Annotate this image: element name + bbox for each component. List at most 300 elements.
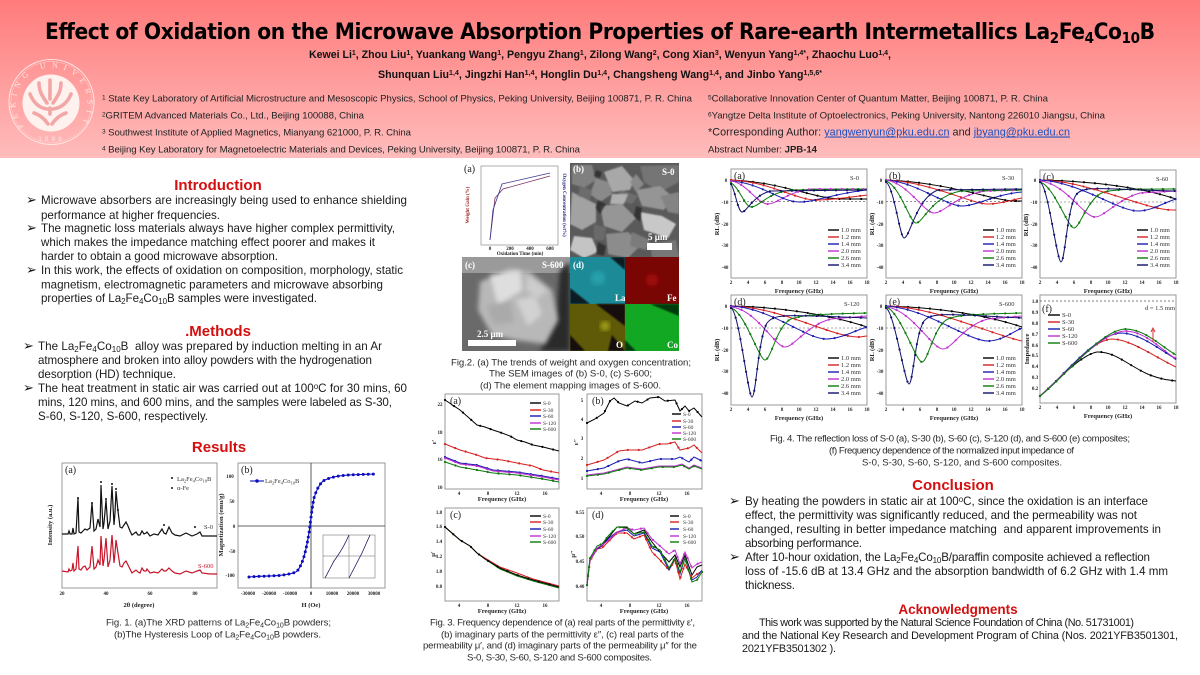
inset loop [323, 535, 375, 578]
chart: reflection loss S-120: 18 [864, 408, 870, 413]
chart: normalized impedance: 2 [1039, 406, 1042, 411]
text block: conclusion bullets: Fe [901, 551, 914, 564]
chart: reflection loss S-600: 16 [1002, 408, 1008, 413]
chart: reflection loss S-120: 0 [725, 305, 728, 310]
chart: reflection loss S-0: Frequency (GHz) [775, 288, 823, 295]
legend: S-120 [683, 431, 696, 437]
chart: reflection loss S-0: 10 [796, 281, 802, 286]
caption: figure 3 [423, 618, 697, 664]
chart: reflection loss S-30: -10 [877, 201, 884, 206]
chart: reflection loss S-600: -20 [877, 349, 884, 354]
chart: normalized impedance: Frequency (GHz) [1084, 413, 1132, 420]
chart: normalized impedance: 0.3 [1032, 376, 1039, 381]
legend [670, 514, 696, 546]
chart: imaginary permittivity: 5 [581, 399, 584, 404]
chart: reflection loss S-120: 8 [781, 408, 784, 413]
chart: real permeability: 1.4 [436, 540, 443, 545]
legend: S-600 [683, 540, 696, 546]
chart: imaginary permeability: (d) [592, 510, 604, 521]
chart: XRD patterns: Intensity (a.u.) [47, 505, 54, 545]
legend: S-120 [543, 534, 556, 540]
chart: weight and oxygen trends: (a) [464, 164, 475, 175]
chart: reflection loss S-30: -40 [877, 266, 884, 271]
chart: XRD patterns: Fe [186, 476, 193, 483]
chart: XRD patterns: (a) [65, 465, 76, 476]
chart: reflection loss S-0: 8 [781, 281, 784, 286]
legend: S-60 [1062, 326, 1074, 333]
caption: figure 1: 10 [276, 622, 284, 630]
chart: hysteresis loop: 10 [290, 480, 296, 486]
chart: real permeability: μ′ [430, 551, 437, 557]
legend: 2.6 mm [841, 383, 861, 390]
legend [672, 412, 696, 443]
chart: hysteresis loop: Co [283, 478, 290, 485]
legend: 3.4 mm [996, 390, 1016, 397]
chart: real permittivity: 16 [542, 492, 548, 497]
chart: imaginary permeability: 12 [656, 604, 662, 609]
chart: real permittivity: 8 [487, 492, 490, 497]
text block: introduction bullets: The magnetic loss materials always have higher complex permittivity, [41, 222, 395, 235]
chart: real permeability: 0.8 [436, 585, 443, 590]
caption: figure 1: Fig. 1. (a)The XRD patterns of La [106, 618, 245, 628]
chart: real permeability: 1.2 [436, 555, 443, 560]
title: 2 [1050, 29, 1059, 47]
title: Effect of Oxidation on the Microwave Absorption Properties of Rare-earth Intermetallics La [45, 19, 1050, 45]
chart: XRD patterns: 40 [104, 592, 109, 597]
text block: introduction bullets: ➢ [26, 263, 37, 278]
chart: real permittivity: (a) [450, 396, 461, 407]
legend: S-30 [683, 419, 694, 425]
chart: normalized impedance: 8 [1090, 406, 1093, 411]
chart: XRD patterns: 60 [148, 592, 153, 597]
legend: 2.6 mm [841, 255, 861, 262]
chart: normalized impedance: 1.0 [1032, 300, 1039, 305]
text block: conclusion bullets: ➢ [729, 550, 740, 565]
chart: reflection loss S-30: -30 [877, 244, 884, 249]
chart: hysteresis loop: B [295, 478, 300, 485]
chart: reflection loss S-30: 2 [885, 281, 888, 286]
legend: 1.0 mm [996, 355, 1016, 362]
text block: introduction bullets: ➢ [26, 193, 37, 208]
legend: S-600 [683, 437, 696, 443]
chart: reflection loss S-30: 16 [1002, 281, 1008, 286]
authors: , Honglin Du [534, 69, 597, 81]
legend: S-0 [543, 401, 551, 407]
chart: reflection loss S-120 [714, 295, 870, 422]
chart: XRD patterns: 2θ (degree) [124, 602, 154, 609]
chart: real permittivity: 10 [438, 486, 443, 491]
caption: figure 1: 2 [245, 622, 249, 630]
chart: imaginary permittivity: 8 [629, 492, 632, 497]
caption: figure 1 [106, 618, 331, 642]
legend: 1.2 mm [841, 234, 861, 241]
chart: real permeability: 4 [458, 604, 461, 609]
chart: weight and oxygen trends: 200 [506, 247, 514, 252]
chart: reflection loss S-30: 12 [968, 281, 974, 286]
text block: acknowledgments [742, 617, 1178, 655]
text block: methods bullets: 4 [92, 345, 97, 354]
chart: real permeability: 1.0 [436, 570, 443, 575]
image: SEM S-0: S-0 [662, 167, 675, 177]
chart: reflection loss S-60: -40 [1031, 266, 1038, 271]
chart: reflection loss S-600: 4 [902, 408, 905, 413]
chart: reflection loss S-30: RL (dB) [869, 213, 876, 235]
chart: reflection loss S-600: Frequency (GHz) [930, 415, 978, 422]
chart: reflection loss S-0: 18 [864, 281, 870, 286]
affiliations right: Yangtze Delta Institute of Optoelectronics, Peking University, Nantong 226010 Jiangsu, China [712, 110, 1106, 122]
chart: hysteresis loop [218, 463, 385, 609]
legend: 2.6 mm [996, 255, 1016, 262]
text block: introduction bullets: performance at higher frequencies. [41, 209, 220, 222]
affiliations left: State Key Laboratory of Artificial Microstructure and Mesoscopic Physics, School of Physics, Peking University, Beijing 100871, P. R. China [106, 94, 693, 104]
chart: reflection loss S-600 [869, 295, 1025, 422]
chart: reflection loss S-60: Frequency (GHz) [1084, 288, 1132, 295]
authors: , Zhaochu Luo [806, 49, 879, 61]
legend: 1.2 mm [996, 234, 1016, 241]
chart: reflection loss S-60: 14 [1140, 281, 1145, 286]
authors: 1 [497, 50, 501, 57]
legend: S-120 [543, 421, 556, 427]
chart: reflection loss S-60: 8 [1090, 281, 1093, 286]
chart: imaginary permeability: 4 [600, 604, 603, 609]
chart: reflection loss S-60: 18 [1174, 281, 1179, 286]
caption: figure 1: Fe [249, 618, 260, 628]
authors: , and Jinbo Yang [719, 69, 803, 81]
chart: reflection loss S-60: 10 [1106, 281, 1111, 286]
chart: hysteresis loop: -10000 [283, 592, 298, 597]
chart: reflection loss S-120: (d) [734, 297, 746, 308]
legend: 3.4 mm [996, 262, 1016, 269]
legend [983, 355, 1016, 397]
legend: S-0 [543, 514, 551, 520]
chart: weight and oxygen trends: 0 [489, 247, 492, 252]
chart: reflection loss S-60: (c) [1043, 172, 1054, 183]
chart: normalized impedance [1024, 295, 1179, 420]
chart: imaginary permittivity: Frequency (GHz) [620, 496, 668, 503]
legend: 3.4 mm [1150, 262, 1170, 269]
image: SEM S-600: 2.5 μm [477, 329, 504, 339]
chart: normalized impedance: 0.4 [1032, 365, 1039, 370]
legend: S-120 [683, 534, 696, 540]
chart: reflection loss S-0: -40 [722, 266, 729, 271]
legend: 1.0 mm [841, 355, 861, 362]
text block: introduction bullets: ➢ [26, 221, 37, 236]
chart: reflection loss S-120: 10 [796, 408, 802, 413]
authors: 1,4 [449, 70, 459, 77]
text block: methods bullets: atmosphere and broken into alloy powders with the hydrogenation [38, 354, 372, 367]
caption: figure 1: B powders. [274, 630, 321, 640]
text block: conclusion bullets: After 10-hour oxidation, the La [745, 551, 896, 564]
chart: hysteresis loop: 20000 [347, 592, 360, 597]
authors: , [888, 49, 891, 61]
chart: hysteresis loop: Fe [274, 478, 281, 485]
chart: real permeability: 8 [487, 604, 490, 609]
legend: 2.0 mm [841, 248, 861, 255]
heading: conclusion: Conclusion [912, 477, 994, 494]
chart: reflection loss S-30: (b) [889, 171, 901, 182]
caption: figure 3: S-0, S-30, S-60, S-120 and S-600 composites. [467, 652, 652, 664]
affiliations left: Southwest Institute of Applied Magnetics, Mianyang 621000, P. R. China [106, 128, 412, 138]
chart: reflection loss S-600: 12 [968, 408, 974, 413]
text block: introduction bullets: magnetism, electromagnetic parameters and microwave absorbing [41, 278, 383, 292]
text block: acknowledgments: 2021YFB3501302 ). [742, 643, 836, 655]
chart: reflection loss S-600: 8 [936, 408, 939, 413]
chart: reflection loss S-30: S-30 [1002, 175, 1014, 182]
chart: real permeability: 1.6 [436, 525, 443, 530]
affiliations left: 2 [102, 112, 106, 118]
legend [1048, 312, 1078, 347]
chart: reflection loss S-600: RL (dB) [869, 339, 876, 361]
chart: reflection loss S-60: 4 [1056, 281, 1059, 286]
chart: imaginary permittivity: (b) [592, 396, 604, 407]
chart: imaginary permittivity: ε″ [573, 439, 580, 445]
legend: S-60 [683, 425, 694, 431]
text block: methods bullets: The heat treatment in static air was carried out at 100 [38, 382, 314, 395]
chart: normalized impedance: 0.8 [1032, 322, 1039, 327]
chart: normalized impedance: (f) [1042, 304, 1052, 315]
text block: methods bullets: o [314, 382, 319, 391]
legend: S-600 [1062, 340, 1078, 347]
text block: acknowledgments: This work was supported by the Natural Science Foundation of China (No. 51731001) [759, 617, 1134, 629]
text block: introduction bullets: harder to obtain a good microwave absorption. [41, 250, 278, 263]
text block: methods bullets: C for 30 mins, 60 [318, 382, 407, 395]
chart: real permittivity: 16 [438, 458, 443, 463]
legend: S-120 [1062, 333, 1078, 340]
chart: imaginary permeability [570, 508, 702, 615]
chart: imaginary permittivity: 4 [581, 418, 584, 423]
authors: 2 [653, 50, 657, 57]
chart: real permeability: 1.8 [436, 511, 443, 516]
caption: figure 1: (b)The Hysteresis Loop of La [114, 630, 235, 640]
chart: reflection loss S-0: 2 [730, 281, 733, 286]
text block: methods bullets: Co [97, 340, 112, 353]
affiliations left: 4 [102, 146, 106, 152]
text block: conclusion bullets: absorbing performance. [745, 537, 862, 550]
authors: 1,4 [597, 70, 607, 77]
authors: , Yuankang Wang [410, 49, 497, 61]
heading: acknowledgments: Acknowledgments [898, 602, 1018, 617]
chart: XRD patterns: 80 [192, 592, 198, 597]
affiliations left: 1 [102, 94, 106, 102]
heading: results: Results [192, 439, 246, 456]
chart: XRD patterns: 4 [193, 478, 196, 484]
caption: figure 1: 4 [260, 622, 264, 630]
text block: methods bullets: mins, 120 mins, and 600 mins, and the samples were labeled as S-30, [38, 396, 392, 409]
caption: figure 3: permeability μ′, and (d) imaginary parts of the permeability μ″ for the [423, 640, 697, 652]
legend [530, 514, 556, 546]
title: 4 [1085, 29, 1094, 47]
chart: reflection loss S-0: 12 [814, 281, 819, 286]
chart: reflection loss S-600: 0 [880, 305, 883, 310]
text block: methods bullets: 10 [112, 345, 121, 354]
chart: normalized impedance: 10 [1106, 406, 1111, 411]
chart: reflection loss S-0: 0 [725, 179, 728, 184]
chart: real permeability: 12 [514, 604, 520, 609]
authors: 1,4 [878, 50, 888, 57]
text block: methods bullets: B alloy was prepared by induction melting in an Ar [121, 340, 382, 353]
chart: hysteresis loop: La [265, 478, 272, 485]
text block: conclusion bullets: thickness. [745, 579, 795, 592]
legend: S-60 [543, 527, 554, 533]
chart: reflection loss S-30: Frequency (GHz) [930, 288, 978, 295]
text block: conclusion bullets: effect, the permittivity was significantly reduced, and the permeability was not [745, 509, 1138, 522]
text block: introduction bullets: which makes the impedance matching effect poorer and makes it [40, 236, 376, 249]
chart: real permeability: Frequency (GHz) [478, 608, 526, 615]
chart: normalized impedance: 16 [1156, 406, 1162, 411]
chart: reflection loss S-0: 6 [764, 281, 767, 286]
text block: conclusion bullets: 2 [896, 556, 901, 565]
chart: real permeability: (c) [450, 510, 461, 521]
chart: reflection loss S-30: -20 [877, 223, 884, 228]
legend: S-30 [1062, 319, 1074, 326]
chart: real permittivity: 12 [514, 492, 520, 497]
text block: conclusion bullets: ➢ [729, 494, 740, 509]
legend: 2.0 mm [841, 376, 861, 383]
caption: figure 1: Co [254, 630, 266, 640]
chart: weight and oxygen trends: 400 [526, 247, 534, 252]
chart: hysteresis loop: 0 [310, 592, 313, 597]
chart: hysteresis loop: 50 [230, 500, 235, 505]
chart: imaginary permeability: 8 [629, 604, 632, 609]
affiliations right: *Corresponding Author: yangwenyun@pku.edu.cn and jbyang@pku.edu.cn [708, 126, 1070, 138]
chart: reflection loss S-600: 2 [885, 408, 888, 413]
image: SEM S-600: S-600 [542, 260, 564, 270]
chart: real permeability [430, 508, 559, 615]
chart: reflection loss S-120: Frequency (GHz) [775, 415, 823, 422]
chart: reflection loss S-0: 16 [848, 281, 853, 286]
chart: weight and oxygen trends: Weight Gain (%) [466, 186, 471, 223]
chart: imaginary permeability: μ″ [570, 550, 577, 558]
legend: 1.4 mm [841, 369, 861, 376]
chart: reflection loss S-0: -30 [722, 244, 729, 249]
chart: reflection loss S-120: S-120 [844, 301, 860, 308]
chart: hysteresis loop: 10000 [326, 592, 339, 597]
chart: real permeability: 16 [542, 604, 548, 609]
affiliations left: Beijing Key Laboratory for Magnetoelectric Materials and Devices, Peking University, Beijing 100871, P. R. China [106, 144, 581, 156]
chart: normalized impedance: 4 [1056, 406, 1059, 411]
legend [530, 401, 556, 433]
chart: weight and oxygen trends [464, 164, 566, 257]
affiliations right: 5 [708, 94, 712, 102]
caption: figure 4: Fig. 4. The reflection loss of S-0 (a), S-30 (b), S-60 (c), S-120 (d), and S-600 (e) composites; [770, 434, 1130, 444]
caption: figure 4: S-0, S-30, S-60, S-120, and S-600 composites. [862, 458, 1062, 468]
chart: normalized impedance: 14 [1140, 406, 1145, 411]
legend: 1.4 mm [1150, 241, 1170, 248]
text block: acknowledgments: and the National Key Research and Development Program of China (Nos. 2021YFB3501301, [742, 630, 1178, 642]
chart: imaginary permittivity: 3 [581, 437, 584, 442]
image: SEM S-600 [462, 257, 570, 351]
text block: conclusion bullets: 10 [933, 556, 942, 565]
text block: conclusion bullets: Co [918, 551, 933, 564]
text block: methods bullets [23, 339, 407, 423]
chart: XRD patterns: 20 [60, 592, 65, 597]
chart: XRD patterns: α-Fe [177, 485, 189, 492]
legend: 2.0 mm [996, 376, 1016, 383]
chart: reflection loss S-30: 10 [952, 281, 957, 286]
legend: S-600 [543, 427, 556, 433]
text block: methods bullets: Fe [79, 340, 92, 353]
legend: S-30 [543, 408, 554, 414]
caption: figure 3: (b) imaginary parts of the permittivity ε″, (c) real parts of the [441, 630, 684, 640]
chart: reflection loss S-60: -10 [1031, 201, 1038, 206]
image: SEM S-0: 5 μm [648, 232, 668, 242]
authors: 1,5,6* [804, 70, 822, 77]
authors: 1,4 [525, 70, 535, 77]
legend: S-0 [683, 412, 691, 418]
chart: reflection loss S-600: (e) [889, 297, 900, 308]
chart: XRD patterns: 10 [202, 478, 208, 484]
chart: imaginary permittivity: 16 [684, 492, 690, 497]
authors: 1 [352, 50, 356, 57]
chart: weight and oxygen trends: Oxidation Time (min) [497, 252, 544, 257]
chart: reflection loss S-60: 2 [1039, 281, 1042, 286]
chart: reflection loss S-600: 10 [952, 408, 957, 413]
title: Co [1094, 19, 1122, 45]
affiliations right: Abstract Number: JPB-14 [708, 144, 818, 156]
legend: 1.2 mm [996, 362, 1016, 369]
image: element mapping: La [615, 293, 626, 303]
legend [828, 227, 861, 269]
text block: methods bullets: ➢ [23, 381, 34, 396]
text block: conclusion bullets: 4 [914, 556, 919, 565]
chart: reflection loss S-600: 6 [919, 408, 922, 413]
text block: introduction bullets: Co [143, 292, 158, 305]
chart: imaginary permeability: 0.50 [576, 535, 585, 540]
legend: 1.0 mm [1150, 227, 1170, 234]
chart: reflection loss S-0: (a) [734, 171, 745, 182]
chart: hysteresis loop: H (Oe) [302, 602, 320, 609]
text block: methods bullets: S-60, S-120, S-600, respectively. [38, 410, 208, 423]
text block: introduction bullets: B samples were investigated. [167, 292, 317, 305]
text block: conclusion bullets: changed, resulting in better impedance matching and apparent improvements in [745, 523, 1161, 536]
caption: figure 2: (d) The element mapping images of S-600. [480, 380, 661, 392]
chart: reflection loss S-120: 2 [730, 408, 733, 413]
chart: reflection loss S-600: -10 [877, 327, 884, 332]
text block: introduction bullets: 10 [158, 297, 168, 306]
image: element mapping: O [616, 340, 623, 350]
text block: conclusion bullets: o [959, 495, 964, 504]
icon: Peking University seal [8, 59, 94, 145]
legend: 1.2 mm [1150, 234, 1170, 241]
text block: introduction bullets: properties of La [41, 292, 121, 305]
legend: 1.4 mm [841, 241, 861, 248]
legend: S-0 [1062, 312, 1071, 319]
authors: , Cong Xian [657, 49, 715, 61]
text block: methods bullets: ➢ [23, 339, 34, 354]
chart: XRD patterns: S-600 [198, 563, 214, 570]
chart: XRD patterns: S-0 [204, 524, 213, 531]
chart: normalized impedance: d = 1.5 mm [1145, 305, 1175, 312]
chart: imaginary permittivity [573, 394, 702, 503]
chart: normalized impedance: 0.5 [1032, 354, 1039, 359]
chart: reflection loss S-600: -40 [877, 392, 884, 397]
chart: reflection loss S-120: 6 [764, 408, 767, 413]
text block: conclusion bullets: By heating the powders in static air at 100 [745, 495, 959, 508]
chart: hysteresis loop: 0 [233, 525, 236, 530]
chart: hysteresis loop: -50 [229, 550, 236, 555]
chart: reflection loss S-0: -10 [722, 201, 729, 206]
chart: hysteresis loop: (b) [241, 465, 253, 476]
authors: Shunquan Liu [378, 69, 449, 81]
text block: conclusion bullets: B/paraffin composite achieved a reflection [941, 551, 1150, 564]
title: Fe [1059, 19, 1085, 45]
caption: figure 3: Fig. 3. Frequency dependence of (a) real parts of the permittivity ε′, [430, 618, 695, 628]
legend: 2.6 mm [996, 383, 1016, 390]
chart: reflection loss S-120: -20 [722, 349, 729, 354]
chart: real permittivity [431, 394, 559, 503]
image: SEM S-0 [570, 163, 679, 258]
text block: conclusion bullets: loss of -15.6 dB at 13.4 GHz and the absorption bandwidth of 6.2 GHz with 1.4 mm [745, 565, 1168, 578]
